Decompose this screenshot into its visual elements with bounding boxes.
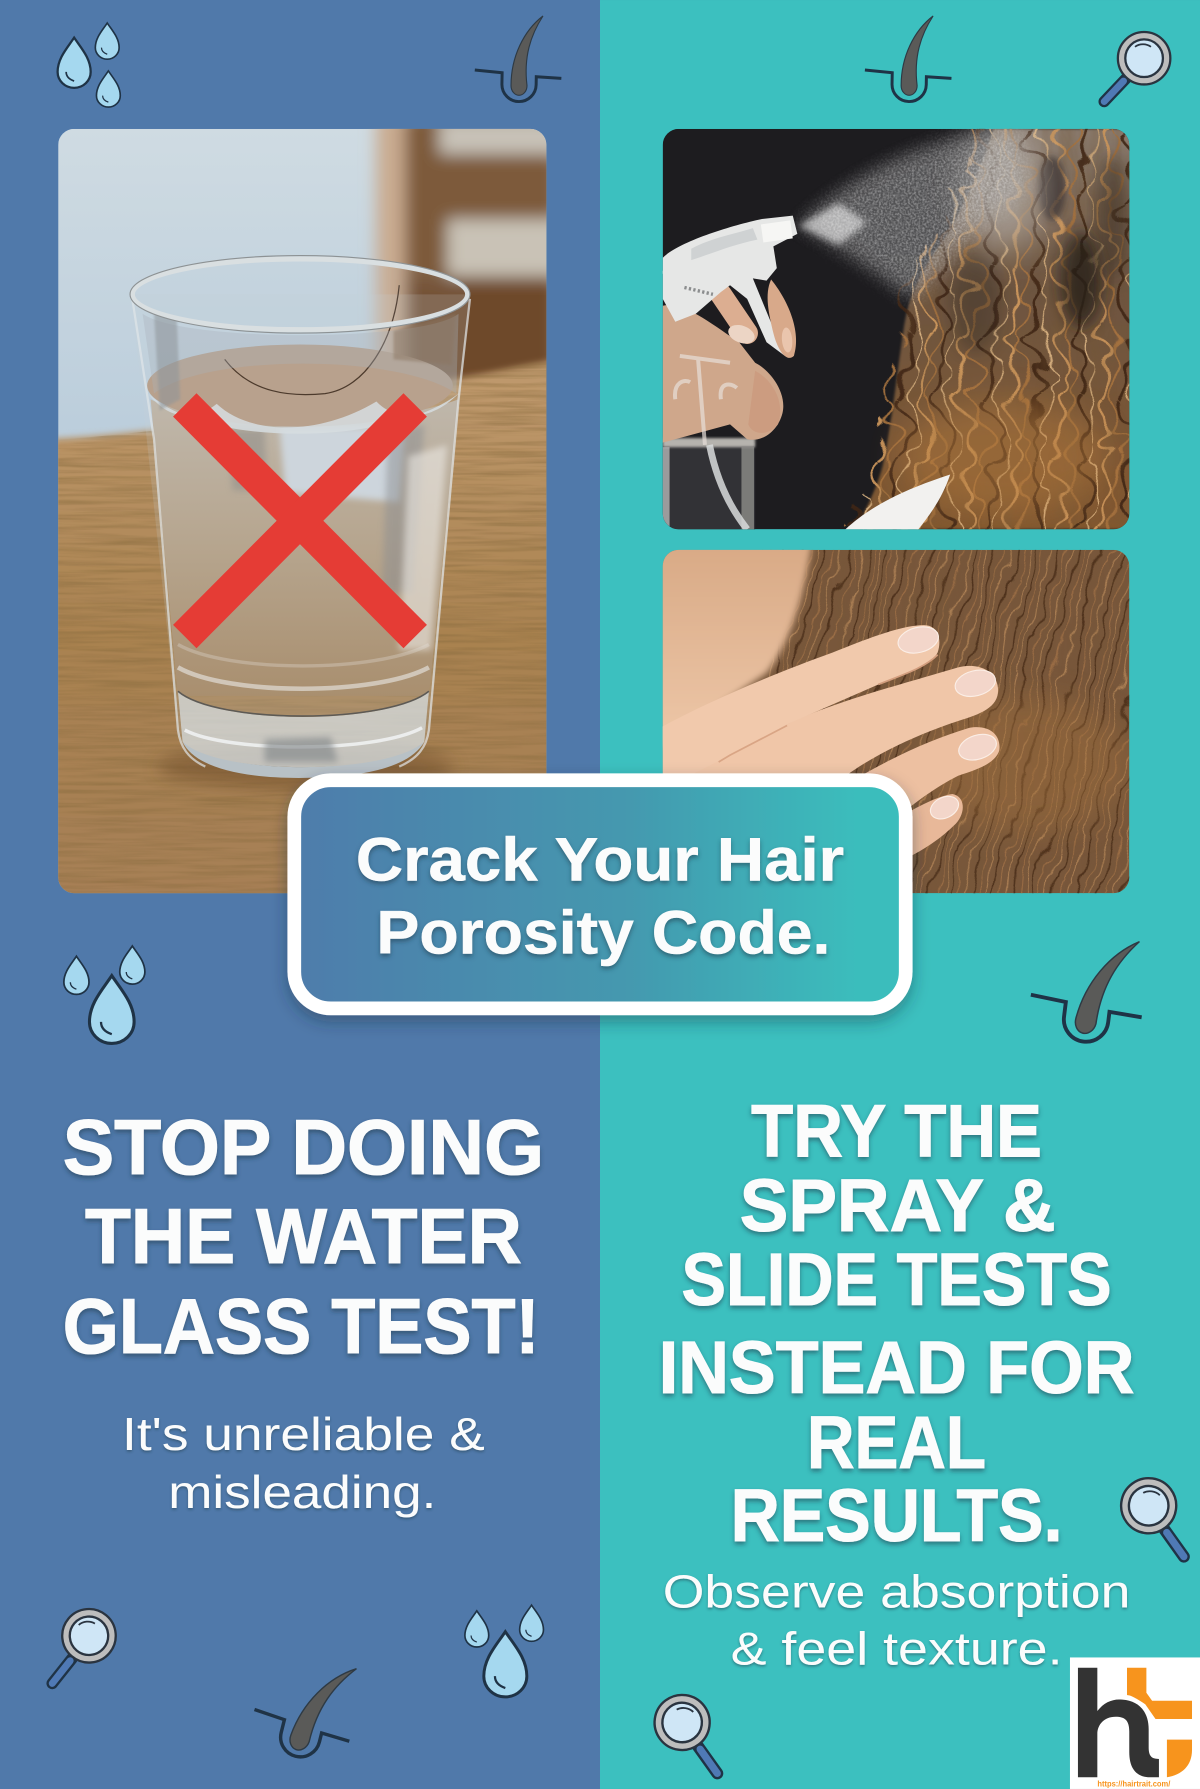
red cross [185, 405, 415, 637]
heading: try the spray and slide tests instead: INSTEAD FOR [659, 1326, 1134, 1409]
photo: spray bottle misting curly hair [663, 114, 1152, 536]
heading: try the spray and slide tests instead [659, 1090, 1134, 1557]
heading: stop doing the water glass test: THE WATER [85, 1194, 522, 1280]
icon: hair follicle bottom [246, 1655, 356, 1768]
icon: water drops bottom right [465, 1605, 543, 1697]
logo letter t [1127, 1668, 1192, 1777]
glass body [130, 256, 470, 778]
panel: left blue background [0, 0, 600, 1789]
bottle lower [663, 443, 755, 532]
heading: try the spray and slide tests instead: SPRAY & [740, 1164, 1056, 1247]
photo: water glass with red cross [46, 114, 565, 907]
text: observe absorption and feel texture [663, 1565, 1130, 1674]
icon: hair follicle top left [474, 16, 561, 102]
heading: stop doing the water glass test: GLASS TEST! [63, 1284, 540, 1370]
hair mass [844, 128, 1130, 530]
text: unreliable and misleading: misleading. [168, 1466, 436, 1518]
text: observe absorption and feel texture: & feel texture. [731, 1622, 1063, 1674]
text: unreliable and misleading: It's unreliable & [122, 1408, 485, 1460]
hand [663, 305, 783, 443]
fingers on trigger [768, 279, 796, 358]
title text [356, 826, 844, 968]
text: observe absorption and feel texture: Observe absorption [663, 1565, 1130, 1617]
title card [294, 780, 906, 1008]
heading: stop doing the water glass test: STOP DOING [63, 1105, 544, 1191]
icon: magnifier bottom center [649, 1691, 727, 1773]
heading: try the spray and slide tests instead: RESULTS. [731, 1474, 1063, 1557]
icon: magnifier top right [1104, 32, 1170, 102]
icon: magnifier bottom left [46, 1607, 119, 1683]
title text: Crack Your Hair [356, 826, 844, 895]
heading: try the spray and slide tests instead: TRY THE [751, 1090, 1042, 1173]
icon: hair follicle top right [864, 16, 952, 102]
shirt [845, 474, 950, 530]
bottle neck and tube [675, 356, 737, 445]
trigger and head [663, 216, 797, 356]
photo: fingers sliding along hair [662, 550, 1130, 894]
logo letter h [1078, 1668, 1159, 1777]
icon: hair follicle middle right [1026, 931, 1143, 1048]
logo url: https://hairtrait.com/ [1097, 1778, 1171, 1788]
title text: Porosity Code. [376, 899, 830, 968]
heading: try the spray and slide tests instead: SLIDE TESTS [682, 1238, 1112, 1321]
icon: magnifier right [1115, 1475, 1194, 1557]
text: unreliable and misleading [122, 1408, 485, 1518]
mist [798, 129, 1027, 299]
icon: water drops top left [58, 23, 120, 107]
panel: right teal background [600, 0, 1200, 1789]
icon: water drops middle left [64, 946, 145, 1043]
logo: hairtrait [1070, 1657, 1200, 1789]
fingers [656, 625, 1000, 858]
nails [895, 623, 1000, 823]
heading: stop doing the water glass test [63, 1105, 544, 1370]
heading: try the spray and slide tests instead: REAL [807, 1401, 986, 1484]
